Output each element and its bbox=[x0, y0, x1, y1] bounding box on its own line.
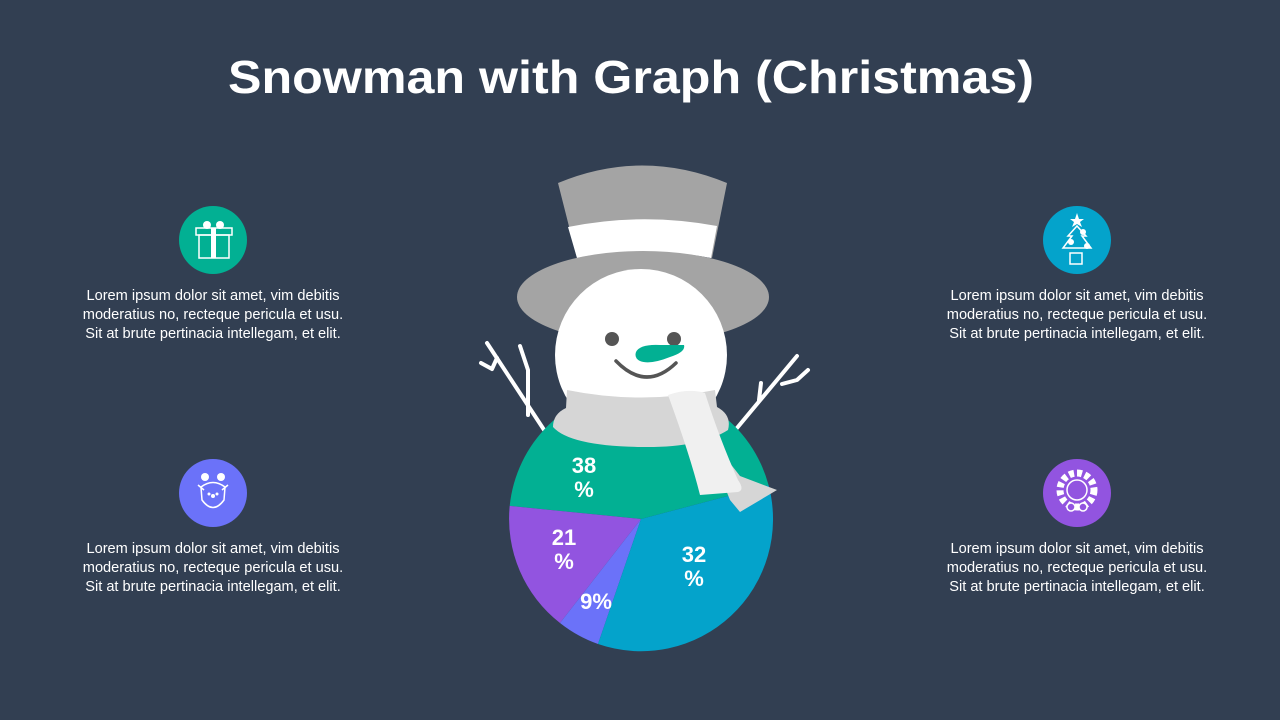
labels: 21 bbox=[552, 525, 576, 550]
icon: wreath bbox=[1043, 459, 1111, 527]
text block: Lorem ipsum dolor sit amet, vim debitis bbox=[86, 541, 340, 557]
pie chart body bbox=[509, 387, 773, 651]
eyes bbox=[605, 332, 681, 346]
smile bbox=[616, 361, 676, 377]
panel: top-left bbox=[83, 206, 343, 342]
icon: christmas tree bbox=[1043, 206, 1111, 274]
labels: % bbox=[574, 477, 594, 502]
icon: reindeer bbox=[179, 459, 247, 527]
text block: Lorem ipsum dolor sit amet, vim debitis bbox=[950, 288, 1204, 304]
text block: Lorem ipsum dolor sit amet, vim debitis bbox=[86, 288, 340, 304]
nose bbox=[636, 345, 684, 362]
panel: bottom-left bbox=[83, 459, 343, 595]
text block: Sit at brute pertinacia intellegam, et elit. bbox=[949, 326, 1205, 342]
labels: 9% bbox=[580, 589, 612, 614]
labels: % bbox=[684, 566, 704, 591]
scarf tail bbox=[668, 391, 777, 512]
icon: gift bbox=[179, 206, 247, 274]
title: Snowman with Graph (Christmas) bbox=[228, 51, 1034, 103]
scarf collar bbox=[553, 390, 729, 447]
arm: right bbox=[737, 356, 808, 428]
labels: 32 bbox=[682, 542, 706, 567]
panel: bottom-right bbox=[947, 459, 1207, 595]
text block: moderatius no, recteque pericula et usu. bbox=[947, 307, 1207, 323]
labels: 38 bbox=[572, 453, 596, 478]
text block: moderatius no, recteque pericula et usu. bbox=[947, 560, 1207, 576]
text block: Lorem ipsum dolor sit amet, vim debitis bbox=[950, 541, 1204, 557]
labels bbox=[552, 453, 706, 614]
panel: top-right bbox=[947, 206, 1207, 342]
text block: moderatius no, recteque pericula et usu. bbox=[83, 560, 343, 576]
snowman bbox=[481, 166, 808, 651]
labels: % bbox=[554, 549, 574, 574]
text block: Sit at brute pertinacia intellegam, et elit. bbox=[949, 579, 1205, 595]
text block: Sit at brute pertinacia intellegam, et elit. bbox=[85, 579, 341, 595]
hat bbox=[517, 166, 769, 343]
text block: Sit at brute pertinacia intellegam, et elit. bbox=[85, 326, 341, 342]
arm: left bbox=[481, 343, 552, 442]
head bbox=[555, 269, 727, 441]
text block: moderatius no, recteque pericula et usu. bbox=[83, 307, 343, 323]
